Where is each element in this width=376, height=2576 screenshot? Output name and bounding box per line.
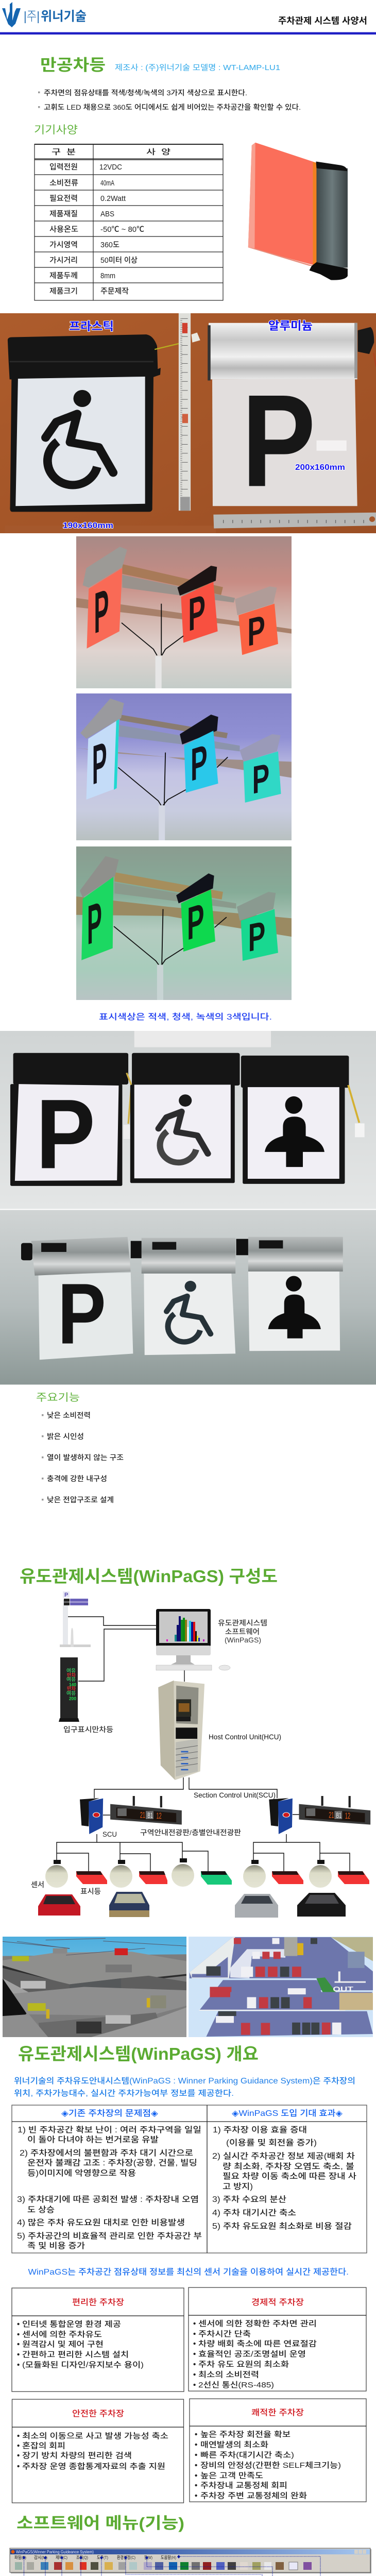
panel: comfortable parking: • [195,2461,197,2470]
spec table: 입력전원 [49,163,78,172]
labels: sensor and lamp [31,1880,101,1895]
panel: comfortable parking: • [195,2451,197,2460]
icon: entrance sign tower: 140 [69,1682,76,1688]
heading: 기기사양: 기기사양 [34,124,78,136]
left section controller and board: 21 [140,1810,145,1820]
panel: convenient parking: • [17,2361,20,2369]
right column: benefits: 1) 주차장 이용 효율 증대 [213,2125,307,2134]
page header [0,2,376,35]
panel: comfortable parking: 매연발생의 최소화 [200,2441,268,2449]
intro bullets [38,89,301,111]
intro paragraph: 위너기술의 주차유도안내시스템(WinPaGS : Winner Parking Guidance System)은 주차장의 [14,2076,355,2086]
icon: parking sign pole: P [64,1592,68,1598]
right column: benefits: 고 방지) [223,2182,253,2191]
panel: comfortable parking: • [195,2441,197,2449]
cars [38,1892,346,1918]
label: HCU: Host Control Unit(HCU) [209,1733,281,1741]
menu bar: 감시(M) [34,2555,47,2560]
photo labels: 200x160mm [295,463,345,472]
panel: convenient parking: 간편하고 편리한 시스템 설치 [22,2350,129,2359]
panel: economical parking [189,2287,366,2391]
statement: real-time sensor information: WinPaGS는 주차공간 점유상태 정보를 최신의 센서 기술을 이용하여 실시간 제공한다. [28,2267,349,2277]
panel: economical parking: • [193,2381,196,2389]
tape measure [179,313,200,511]
menu bar: 제어(C) [56,2555,67,2560]
panel: comfortable parking: • [195,2481,197,2490]
document title: 주차관제 시스템 사양서 [278,16,367,26]
panel: economical parking: • [193,2330,196,2338]
panel: economical parking: 경제적 주차장 [251,2298,304,2307]
panel: comfortable parking: 높은 고객 만족도 [200,2471,263,2480]
title bar: WinPaGS(Winner Parking Guideance System) [16,2549,94,2554]
panel: safe parking [12,2399,183,2503]
intro paragraph [14,2076,355,2098]
photo: lamps lit green: P [248,913,265,960]
panel: safe parking: 최소의 이동으로 사고 발생 가능성 축소 [22,2432,168,2441]
main function bullets: 열이 발생하지 않는 구조 [47,1453,124,1462]
right section controller and board: 12 [345,1811,350,1821]
label: software: 소프트웨어 [225,1628,260,1636]
left column: problems: 5) 주차공간의 비효율적 관리로 인한 주차공간 부 [17,2231,202,2241]
panel: safe parking: 혼잡의 회피 [22,2442,65,2450]
heading: 구성도: 유도관제시스템(WinPaGS) 구성도 [20,1567,278,1586]
right column: benefits: 3) 주차 수요의 분산 [212,2195,286,2204]
labels: sensor and lamp: 센서 [31,1880,44,1889]
panel: safe parking: 장기 방치 차량의 편리한 검색 [22,2451,132,2460]
panel: comfortable parking: • [195,2430,197,2439]
photo: lamps lit green: P [87,890,102,957]
spec table: 12VDC [99,163,122,172]
spec table: -50℃ ~ 80℃ [100,226,144,234]
spec table: 0.2Watt [100,195,126,203]
spec table: ABS [100,210,114,218]
heading: 개요: 유도관제시스템(WinPaGS) 개요 [18,2044,259,2063]
label: software [218,1619,267,1644]
label: software: 유도관제시스템 [218,1619,267,1627]
panel: economical parking: • [193,2370,196,2379]
spec table: 제품두께 [49,272,78,280]
left sign: plastic [8,334,161,512]
photo labels [63,319,345,530]
photo: lamps lit red: P [188,584,206,641]
right column: benefits: (이용률 및 회전율 증가) [226,2138,317,2147]
panel: comfortable parking: 주차장 주변 교통정체의 완화 [200,2492,307,2500]
icon: company logo: |주| [24,9,40,24]
icon: monitor with chart [156,1609,230,1670]
spec table: 제품재질 [49,210,78,218]
panel: comfortable parking [190,2399,366,2502]
heading: 소프트웨어 메뉴: 소프트웨어 메뉴(기능) [16,2514,184,2532]
main function bullets: 낮은 소비전력 [47,1411,91,1419]
panel: convenient parking: (모듈화된 디자인/유지보수 용이) [22,2361,144,2369]
icon: entrance sign tower: 만차 [67,1672,76,1679]
left column: problems: 운전자 불쾌감 고조 : 주차장(공항, 건물, 빌딩 [27,2158,197,2167]
spec table: 가시영역 [49,241,78,249]
photo: lamps lit blue: P [92,730,107,796]
spec table: 사용온도 [49,225,78,234]
panel: safe parking: • [17,2442,20,2450]
left column: problems: 3) 주차대기에 따른 공회전 발생 : 주차장내 오염 [17,2195,199,2204]
connector markers [23,2555,322,2576]
panel: economical parking: 효율적인 공조/조명설비 운영 [198,2350,306,2359]
labels: sensor and lamp: 표시등 [80,1887,101,1895]
left column: problems: 2) 주차장에서의 불편함과 주차 대기 시간으로 [20,2148,193,2158]
panel: comfortable parking: 주차장내 교통정체 회피 [200,2481,287,2490]
photo: lamps lit red [76,536,292,688]
right column: benefits [212,2125,356,2231]
dotted connector lines [24,2556,320,2576]
left section controller and board [80,1796,182,1834]
panel: convenient parking: • [17,2350,20,2359]
main function bullets: 밝은 시인성 [47,1432,84,1440]
photo: lamps lit blue [76,693,292,840]
left column: problems: 4) 많은 주차 유도요원 대치로 인한 비용발생 [17,2218,185,2227]
panel: safe parking: 주차장 운영 종합통계자료의 추출 지원 [22,2462,165,2471]
photo labels: 프라스틱 [69,320,114,333]
icon: company logo: 위너기술 [41,9,87,24]
left column: problems: 도 상승 [27,2205,55,2214]
sign: accessible person [241,1056,365,1184]
comparison table [12,2105,367,2253]
heading: 만공차등: 만공차등 [40,56,106,74]
column headers: ◈기존 주차장의 문제점◈ [61,2109,159,2118]
panel: convenient parking: 센서에 의한 주차유도 [22,2330,102,2339]
label: software: (WinPaGS) [225,1636,261,1644]
photo: lamps lit green: P [187,893,204,950]
panel: comfortable parking: • [195,2492,197,2500]
left column: problems: 1) 빈 주차공간 확보 난이 : 여러 주차구역을 일일 [18,2125,201,2134]
spec table: 소비전류 [49,179,78,188]
panel: convenient parking: 인터넷 통합운영 환경 제공 [22,2320,121,2329]
illustration: parking floors plan: OUT [333,1985,354,1993]
photo: lamps lit green [76,846,292,1000]
panel: comfortable parking: 장비의 안정성(간편한 SELF체크기능) [200,2461,341,2470]
icon: HCU rack [158,1681,204,1780]
photo: lamps lit blue: P [252,755,269,802]
panel: convenient parking: • [17,2320,20,2329]
panel: economical parking: 차량 배회 축소에 따른 연료절감 [198,2340,317,2348]
panel: economical parking: 2선신 통신(RS-485) [198,2381,274,2389]
spec table: 주문제작 [100,287,129,296]
photo: aluminium lamps, front view [0,1210,376,1385]
system diagram [31,1591,370,1918]
menu bar: 조회(Q) [76,2555,88,2560]
product photo: red lamp [248,143,348,280]
label: SCU title: Section Control Unit(SCU) [194,1791,276,1799]
right sign: aluminium: P [242,367,316,514]
spec table: 구 분 [52,148,76,157]
right column: benefits: 필요 차량 이동 축소에 따른 장내 사 [223,2172,356,2181]
menu bar: 도움말(H) [161,2555,176,2560]
heading: 주요기능: 주요기능 [36,1392,80,1403]
panel: economical parking: • [193,2360,196,2369]
panel: economical parking: 최소의 소비전력 [198,2370,259,2379]
sign: wheelchair [131,1238,235,1355]
intro bullets: 주차면의 점유상태를 적색/청색/녹색의 3가지 색상으로 표시한다. [44,89,247,97]
photo: lamps lit blue: P [191,734,208,791]
photo: lamps lit red: P [247,607,265,655]
icon: entrance sign tower: 여유 [66,1676,76,1683]
labels: SCU and boards [102,1828,241,1838]
menu bar [14,2555,176,2560]
main function bullets: 낮은 전압구조로 설계 [47,1496,114,1504]
spec table: 가시거리 [49,256,78,265]
icon: entrance sign tower: 여유 [66,1668,76,1674]
spec table [35,144,223,300]
labels: SCU and boards: 구역안내전광판/층별안내전광판 [140,1828,241,1837]
sign: accessible person [236,1237,343,1351]
right column: benefits: 4) 주차 대기시간 축소 [212,2208,296,2217]
right column: benefits: 2) 실시간 주차공간 정보 제공(배회 차 [212,2151,355,2161]
labels: SCU and boards: SCU [102,1830,117,1838]
panel: safe parking: • [17,2432,20,2441]
left column: problems: 등)이미지에 악영향으로 작용 [27,2168,136,2178]
sign: P [21,1237,133,1362]
panel: convenient parking: 원격감시 및 제어 구현 [22,2340,104,2349]
title bar [10,2549,370,2554]
panel: convenient parking [12,2288,184,2392]
panel: economical parking: • [193,2340,196,2348]
right section controller and board [269,1796,370,1834]
panel: economical parking: 주차시간 단축 [198,2330,251,2338]
spec table: 제품크기 [49,287,78,296]
panel: comfortable parking: 빠른 주차(대기시간 축소) [200,2451,294,2460]
panel: convenient parking: • [17,2330,20,2339]
header rule [0,32,376,35]
main function bullets: 충격에 강한 내구성 [47,1475,107,1483]
icon: entrance sign tower: 여유 [66,1690,76,1697]
panel: comfortable parking: 쾌적한 주차장 [251,2408,304,2417]
photo labels: 알루미늄 [268,319,313,332]
spec table: 40mA [100,179,114,188]
right column: benefits: 량 최소화, 주차장 오염도 축소, 불 [223,2162,354,2171]
panel: economical parking: 센서에 의한 정확한 주차면 관리 [198,2319,317,2328]
sensor connectors [54,1858,324,1864]
software window [10,2548,371,2573]
spec table: 8mm [100,272,115,280]
right sign: aluminium [208,323,376,514]
connection lines [57,1617,350,1871]
icon: company logo [2,2,87,27]
left column: problems: 족 및 비용 증가 [27,2241,85,2250]
panel: economical parking: • [193,2350,196,2359]
icon: parking sign pole [60,1591,91,1647]
spec table: 50미터 이상 [100,256,138,265]
photo: plastic lamps, front view [0,1031,376,1209]
sign: P: P [36,1079,95,1190]
label: entrance display: 입구표시만차등 [63,1725,113,1734]
illustration: 3D parking cutaway [3,1937,186,2037]
icon: entrance sign tower: 200 [69,1696,76,1702]
spec table: 필요전력 [49,194,78,203]
intro paragraph: 위치, 주차가능대수, 실시간 주차가능여부 정보를 제공한다. [14,2089,234,2098]
column headers: ◈WinPaGS 도입 기대 효과◈ [232,2109,343,2118]
spec table: 360도 [100,241,119,249]
panel: comfortable parking: 높은 주차장 회전율 확보 [200,2430,290,2439]
panel: convenient parking: 편리한 주차장 [72,2298,124,2307]
panel: safe parking: • [17,2462,20,2471]
right section controller and board: 21 [329,1810,334,1820]
spec table: 사 양 [146,148,170,157]
panel: economical parking: 주차 유도 요원의 최소화 [198,2360,289,2369]
left column: problems [17,2125,202,2250]
panel: economical parking: • [193,2319,196,2328]
intro bullets: 고휘도 LED 채용으로 360도 어디에서도 쉽게 비어있는 주차공간을 확인할 수 있다. [44,103,301,111]
column headers [61,2109,343,2118]
sensors [45,1864,332,1888]
icon: entrance sign tower [59,1657,79,1722]
left column: problems: 이 돌아 다녀야 하는 번거로움 유발 [27,2135,159,2144]
sign: P [10,1053,131,1190]
toolbar icons [15,2562,312,2570]
panel: safe parking: • [17,2451,20,2460]
left section controller and board: B1 [147,1811,153,1820]
photo: lamps lit red: P [94,577,109,646]
menu bar: 창(W) [144,2555,152,2560]
sign: P: P [58,1266,106,1362]
manufacturer and model: 제조사 : (주)위너기술 모델명 : WT-LAMP-LU1 [115,63,280,72]
menu bar: 환경설정(C) [117,2555,135,2560]
photo: plastic and aluminium lamp with dimensions [0,313,376,533]
panel: convenient parking: • [17,2340,20,2349]
menu bar: 도구(T) [97,2555,108,2560]
right column: benefits: 5) 주차 유도요원 최소화로 비용 절감 [212,2222,352,2231]
icon: entrance sign tower: 만차 [67,1686,76,1692]
right section controller and board: B1 [336,1811,341,1820]
photo labels: 190x160mm [63,521,113,530]
main function bullets [42,1411,124,1504]
indicator lamps [76,1871,369,1885]
left section controller and board: 12 [157,1811,162,1821]
panel: safe parking: 안전한 주차장 [72,2409,124,2418]
steel ruler [213,513,376,529]
illustration: parking floors plan [189,1937,373,2037]
panel: comfortable parking: • [195,2471,197,2480]
menu bar: 파일(F) [14,2555,26,2560]
sign: wheelchair [130,1053,240,1183]
caption: display colours: 표시색상은 적색, 청색, 녹색의 3색입니다. [99,1012,272,1022]
